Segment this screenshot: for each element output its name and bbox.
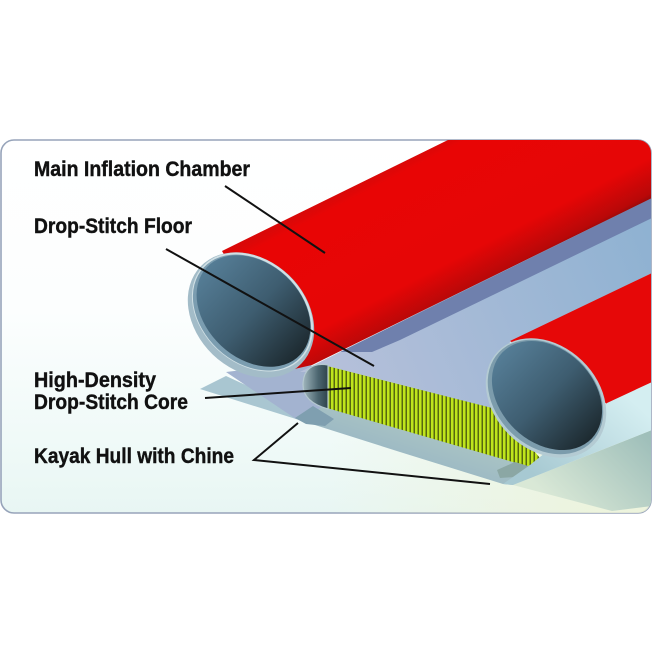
leader: core — [205, 388, 351, 398]
leader: main chamber — [225, 186, 325, 253]
label: drop-stitch core: Drop-Stitch Core — [34, 391, 188, 414]
right chamber side — [503, 382, 652, 485]
floor shadow band — [340, 198, 652, 352]
hull underside — [226, 365, 322, 419]
leader: hull — [254, 423, 490, 484]
leader: floor — [166, 249, 374, 366]
background warm tint — [363, 430, 651, 513]
kayak hull sheet left — [200, 376, 300, 419]
left tube opening — [188, 252, 314, 378]
panel: background card — [1, 140, 651, 513]
label: kayak hull: Kayak Hull with Chine — [34, 445, 234, 468]
hull lip under right tube — [497, 462, 528, 478]
drop-stitch core — [327, 366, 540, 467]
main inflation chamber tube — [222, 139, 652, 370]
label: main inflation chamber: Main Inflation Chamber — [34, 158, 250, 181]
leader lines — [166, 186, 490, 484]
chine fold — [295, 406, 334, 426]
right chamber skin — [510, 273, 652, 404]
hull shadow — [513, 430, 652, 511]
core edge tube — [303, 364, 328, 409]
label: high-density: High-Density — [34, 369, 156, 392]
label: drop-stitch floor: Drop-Stitch Floor — [34, 215, 192, 238]
floor surface — [300, 196, 652, 420]
lower floor strip — [296, 408, 514, 485]
right tube opening — [486, 338, 606, 458]
illustration: kayak cross-section — [162, 139, 652, 513]
